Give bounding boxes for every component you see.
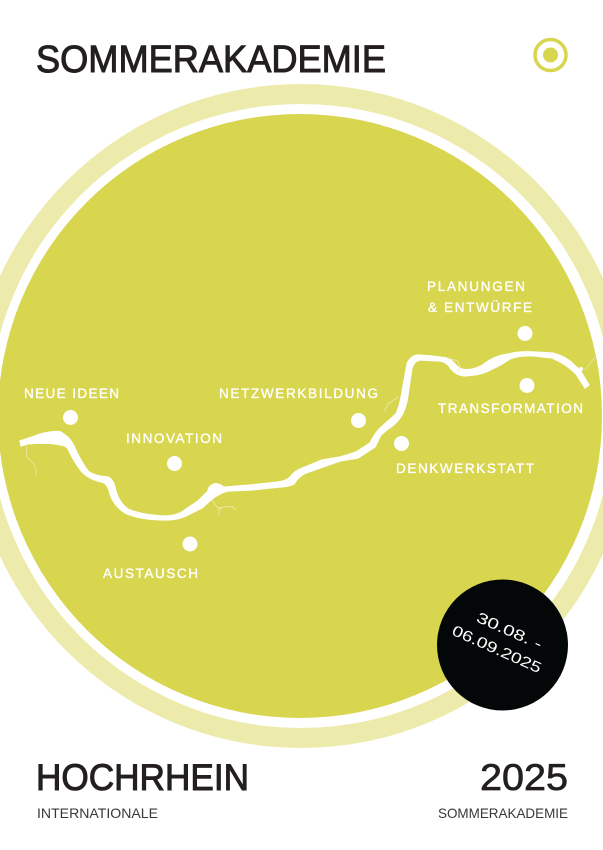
marker: planungen und entwürfe <box>427 279 532 341</box>
pale outer ring <box>0 84 603 748</box>
marker: austausch <box>103 536 198 581</box>
marker: planungen und entwürfe: PLANUNGEN <box>427 279 525 294</box>
subheading: internationale: INTERNATIONALE <box>37 805 158 821</box>
heading: hochrhein: HOCHRHEIN <box>36 757 249 798</box>
heading: year: 2025 <box>480 757 568 798</box>
marker: denkwerkstatt: DENKWERKSTATT <box>396 461 534 476</box>
marker: neue ideen <box>24 386 119 425</box>
marker: innovation: INNOVATION <box>126 431 222 446</box>
date text: 30.08. - <box>474 609 545 653</box>
river map <box>20 352 595 520</box>
marker: netzwerkbildung <box>219 386 378 428</box>
date text <box>449 602 553 677</box>
subheading: sommerakademie: SOMMERAKADEMIE <box>438 805 568 821</box>
date text: 06.09.2025 <box>449 622 544 677</box>
marker: planungen und entwürfe: & ENTWÜRFE <box>428 300 532 315</box>
date badge <box>437 580 568 710</box>
marker: netzwerkbildung: NETZWERKBILDUNG <box>219 386 378 401</box>
river tributaries <box>26 357 595 516</box>
marker: denkwerkstatt <box>394 436 534 476</box>
river widening: upstream basin <box>22 431 68 448</box>
river main channel <box>20 352 589 520</box>
icon: target logo <box>535 40 566 70</box>
marker: innovation <box>126 431 222 471</box>
white ring <box>0 104 603 728</box>
marker: austausch: AUSTAUSCH <box>103 566 198 581</box>
marker: transformation: TRANSFORMATION <box>438 401 583 416</box>
marker: neue ideen: NEUE IDEEN <box>24 386 119 401</box>
main yellow circle <box>0 114 602 718</box>
river widening: eastern reach <box>462 356 503 376</box>
river end dot <box>579 367 583 371</box>
title: SOMMERAKADEMIE <box>36 39 386 81</box>
river bulge <box>207 483 226 495</box>
marker: transformation <box>438 378 583 416</box>
